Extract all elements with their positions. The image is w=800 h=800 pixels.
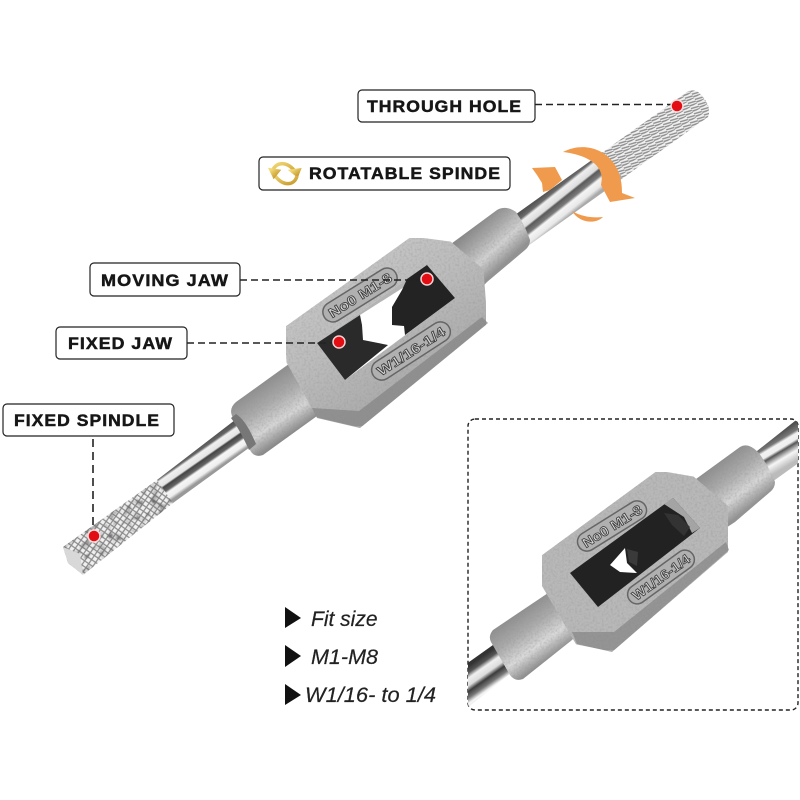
label: fixed spindle: FIXED SPINDLE xyxy=(14,411,160,430)
bullet: M1-M8 xyxy=(285,645,301,667)
inset window xyxy=(570,498,700,607)
lower fixed spindle shaft xyxy=(157,420,257,503)
spec list xyxy=(285,607,436,707)
label: moving jaw xyxy=(90,263,240,296)
plate: W1/16-1/4: W1/16-1/4 xyxy=(374,324,449,379)
inset frame xyxy=(468,419,798,710)
text: W1/16- to 1/4: W1/16- to 1/4 xyxy=(305,684,436,707)
plate: No0 M1-8 xyxy=(319,264,401,326)
leader: fixed jaw xyxy=(187,342,334,344)
marker: fixed spindle xyxy=(88,530,100,542)
text: fit size: Fit size xyxy=(311,608,378,631)
label: fixed spindle xyxy=(3,404,174,436)
label: rotatable spindle xyxy=(259,157,510,190)
wrench body xyxy=(286,238,488,428)
inset body xyxy=(542,472,728,650)
icon: orange rotation arrows xyxy=(532,147,635,222)
upper collar xyxy=(440,208,530,300)
icon: gold rotate arrows xyxy=(271,164,299,184)
label: fixed jaw xyxy=(56,327,187,359)
leader: fixed spindle xyxy=(92,439,94,530)
fixed jaw xyxy=(317,315,388,380)
text: M1-M8: M1-M8 xyxy=(311,646,378,669)
moving jaw xyxy=(392,265,455,335)
lower collar xyxy=(231,356,335,456)
upper knurled end xyxy=(603,90,709,178)
inset plate: No0 M1-8: No0 M1-8 xyxy=(579,502,646,551)
marker: fixed jaw xyxy=(333,336,345,348)
collar ring xyxy=(231,414,256,450)
bullet: fit size xyxy=(285,607,301,628)
marker: through hole xyxy=(671,100,683,112)
inset plate: W1/16-1/4: W1/16-1/4 xyxy=(629,551,694,603)
window xyxy=(317,265,455,380)
upper rotatable spindle shaft xyxy=(505,152,623,248)
label: fixed jaw: FIXED JAW xyxy=(68,334,173,353)
label: through hole xyxy=(358,90,535,122)
plate: No0 M1-8: No0 M1-8 xyxy=(326,270,395,321)
label: moving jaw: MOVING JAW xyxy=(101,271,229,290)
bullet: W1/16 xyxy=(285,684,301,705)
leader: moving jaw xyxy=(240,279,422,281)
main tool: tap wrench xyxy=(63,90,709,575)
marker: moving jaw xyxy=(421,273,433,285)
label: through hole: THROUGH HOLE xyxy=(367,97,522,116)
plate: W1/16-1/4 xyxy=(368,318,454,384)
panel: detail inset xyxy=(455,417,800,712)
lower knurled end xyxy=(63,480,173,575)
label: rotatable spindle: ROTATABLE SPINDE xyxy=(309,164,501,183)
inset wrench xyxy=(455,417,800,712)
leader: through hole xyxy=(535,104,672,106)
